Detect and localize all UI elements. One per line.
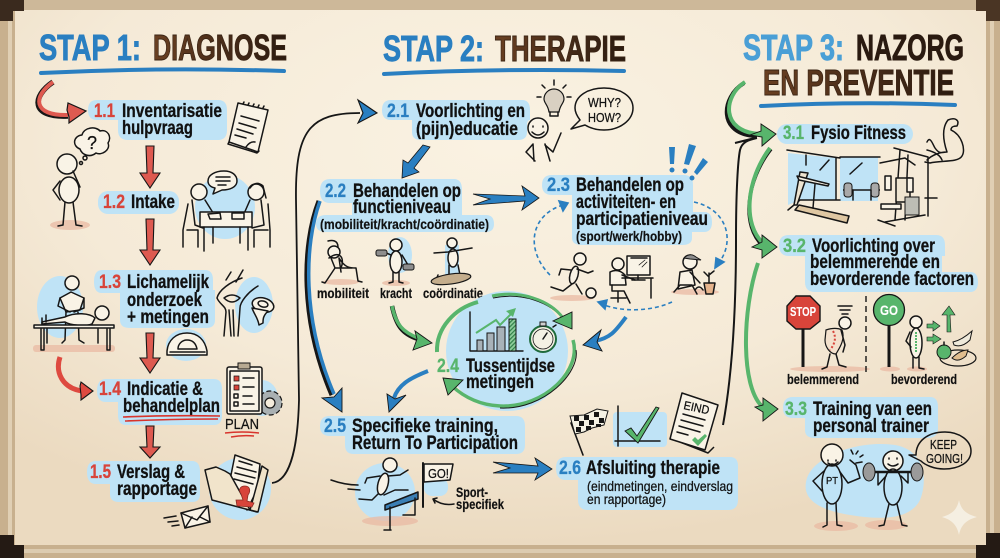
arrow: start to 3.1 [727, 82, 776, 146]
label 2.6 [556, 457, 738, 510]
label 3.3: Training van een [813, 399, 932, 420]
bar chart with trend arrow [470, 308, 523, 351]
icon: stopwatch [530, 322, 556, 352]
callout: why how: HOW? [588, 110, 621, 125]
label 1.4: 1.4 [99, 379, 121, 400]
label 2.6: (eindmetingen, eindverslag [587, 478, 733, 494]
label 1.1: Inventarisatie [122, 101, 222, 122]
label 3.2 [779, 235, 978, 292]
panel: 2.4 tussentijdse metingen [437, 291, 576, 411]
icon: folder with stamp [205, 455, 271, 520]
title: stap 1: DIAGNOSE [153, 27, 287, 68]
icon: soccer player [550, 253, 596, 301]
arrow: 1.2 to 1.3 [140, 219, 160, 265]
cycle arrows [437, 294, 576, 408]
icon: intake conversation [183, 171, 270, 251]
label 1.3: Lichamelijk [127, 272, 209, 293]
label 2.3: 2.3 [547, 175, 570, 196]
title: stap 2 [383, 28, 626, 74]
icon: checkered flag [570, 409, 608, 455]
label 2.3: participatieniveau [576, 209, 708, 230]
title: stap 1: STAP 1: [39, 27, 141, 68]
arrow: onderzoek to 1.4 [58, 357, 93, 400]
icon: flexed arm [925, 119, 964, 163]
arrow: kracht to 2.4 [392, 306, 432, 350]
label 3.1 [777, 123, 913, 144]
icon: coordinatie figure [430, 238, 472, 287]
icon: eind document: EIND [682, 398, 711, 417]
label text: metingen [466, 372, 534, 393]
icon: go sign with figure and healthy food: GO [880, 302, 898, 318]
label 2.6: en rapportage) [587, 491, 666, 507]
label 1.4: behandelplan [123, 396, 220, 417]
label 3.2: 3.2 [783, 236, 806, 257]
title: stap 2: STAP 2: [383, 28, 484, 69]
label 1.4 [97, 379, 222, 425]
icon: hurdle runner with flag: GO! [428, 466, 449, 481]
label 2.1: 2.1 [387, 101, 409, 122]
arrow: 2.3 to 2.4 [583, 317, 626, 351]
icon: mobiliteit figure [322, 241, 362, 285]
icon: thinking figure [50, 128, 110, 230]
label 1.1: hulpvraag [122, 118, 193, 139]
label text: 2.4 [437, 356, 459, 377]
arrow: 1.4 to 1.5 [140, 426, 160, 458]
label 2.6: Afsluiting therapie [586, 458, 720, 479]
label 2.5: Specifieke training, [352, 416, 498, 437]
callout: keep going: KEEP [930, 438, 957, 452]
label 1.4: Indicatie & [127, 379, 203, 400]
icon: gardener [671, 255, 719, 295]
arrow: 2.4 to 2.5 [387, 371, 428, 412]
label 1.2 [98, 191, 179, 214]
title: stap 1 [39, 27, 287, 73]
icon: personal trainer and client: PT [826, 475, 839, 487]
icon: go sign with figure and healthy food [874, 294, 976, 372]
label 3.3: personal trainer [813, 416, 929, 437]
label 1.2: 1.2 [103, 192, 125, 213]
title: stap 3 [743, 27, 964, 106]
icon: chart with check [613, 406, 667, 447]
label 3.1: 3.1 [783, 123, 804, 144]
arrows: dashed activity cycle [534, 201, 727, 310]
arrow: 2.5 to 2.6 [493, 458, 552, 480]
icon: envelope [164, 506, 210, 528]
label 2.1: (pijn)educatie [416, 119, 518, 140]
label 3.1: Fysio Fitness [811, 123, 906, 144]
icon: thinking figure: ? [87, 133, 97, 153]
arrow: flow stap 1 to stap 2 [272, 100, 377, 483]
title: stap 3: STAP 3: [743, 27, 844, 68]
icon: stop sign with figure [787, 296, 870, 372]
icon: gym room [787, 148, 937, 226]
icon: notepad [228, 102, 268, 153]
label 3.2: belemmerende en [810, 252, 940, 273]
label 2.2 [316, 179, 494, 232]
icon: hurdle runner with flag [331, 458, 454, 530]
label 1.5 [87, 461, 200, 502]
callout: why how: WHY? [588, 95, 621, 110]
label 1.3: 1.3 [99, 272, 121, 293]
label 1.3: + metingen [127, 307, 209, 328]
label 3.3 [783, 397, 938, 438]
label 1.1: 1.1 [94, 101, 115, 122]
icon: teaching figure [526, 118, 561, 161]
arrow: 1.1 to 1.2 [140, 146, 160, 188]
label 2.5 [320, 416, 525, 454]
icon: personal trainer and client [806, 444, 924, 531]
labels: mobiliteit kracht coordinatie: mobiliteit [317, 286, 369, 301]
arrow: 3.1 to 3.2 [749, 148, 777, 258]
label 2.1: Voorlichting en [416, 101, 525, 122]
callout: why how [571, 88, 633, 130]
label 2.1 [382, 100, 530, 140]
arrow: start to 1.1 [38, 82, 86, 123]
label 1.3 [94, 270, 215, 328]
title: stap 2: THERAPIE [495, 28, 626, 69]
callout: keep going: GOING! [926, 452, 963, 466]
arrow: 2.1 to 2.2 [402, 145, 430, 178]
label 3.3: 3.3 [785, 399, 807, 420]
icon: exclamation marks [669, 144, 708, 180]
label 2.3 [542, 175, 712, 245]
labels: mobiliteit kracht coordinatie: kracht [380, 286, 412, 301]
icon: stop sign with figure: STOP [790, 305, 816, 319]
icon: kracht figure [376, 237, 414, 286]
labels: mobiliteit kracht coordinatie: coördinatie [423, 286, 483, 301]
callout: keep going [909, 432, 971, 469]
divider: stop / go [865, 296, 867, 375]
icon: office worker [610, 256, 653, 303]
label: bevorderend: bevorderend [891, 372, 957, 387]
label 2.2: functieniveau [353, 197, 451, 218]
arrow: 2.2 to 2.3 [473, 186, 539, 210]
label: sport-specifiek: specifiek [456, 497, 504, 512]
label 1.5: 1.5 [90, 462, 111, 483]
icon: lightbulb [537, 80, 571, 116]
label 2.5: 2.5 [324, 416, 346, 437]
labels: mobiliteit kracht coordinatie [317, 286, 483, 301]
label 2.2: Behandelen op [353, 181, 461, 202]
label 2.3: Behandelen op [576, 175, 684, 196]
icon: clipboard and gear [227, 363, 282, 416]
background ellipse [446, 291, 568, 411]
label 1.5: rapportage [117, 479, 197, 500]
label 2.3: activiteiten- en [576, 192, 676, 213]
label: sport-specifiek [456, 485, 504, 512]
arrow: 2.6 to 3.1 [723, 138, 757, 425]
label 1.5: Verslag & [117, 462, 185, 483]
label text [437, 356, 555, 393]
label 3.2: Voorlichting over [812, 236, 935, 257]
label text: Tussentijdse [466, 356, 555, 377]
label 2.2: (mobiliteit/kracht/coördinatie) [320, 216, 489, 232]
label: sport-specifiek: Sport- [456, 485, 488, 500]
label 2.2: 2.2 [325, 181, 346, 202]
label 2.3: (sport/werk/hobby) [576, 228, 682, 244]
label 1.3: onderzoek [127, 290, 202, 311]
label 2.6: 2.6 [559, 458, 581, 479]
arrow: 1.3 to 1.4 [140, 333, 160, 373]
label 1.2: Intake [131, 192, 175, 213]
arrow: 3.2 to 3.3 [746, 263, 778, 421]
label 2.5: Return To Participation [352, 433, 518, 454]
label 1.1 [88, 100, 227, 140]
icon: knee and tape measure [217, 270, 275, 336]
icon: sparkle watermark [942, 500, 977, 535]
icon: protractor [166, 329, 207, 361]
arrow: 2.2 to 2.5 [307, 201, 342, 412]
label: belemmerend: belemmerend [787, 372, 859, 387]
icon: physical examination [33, 276, 115, 352]
label: PLAN: PLAN [225, 416, 259, 433]
icon: eind document [670, 393, 718, 453]
